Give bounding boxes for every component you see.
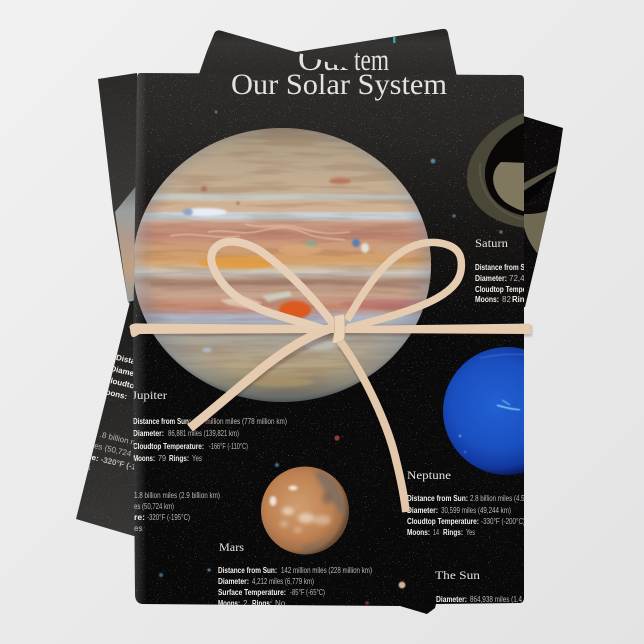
- planet: Mars: [261, 466, 349, 554]
- text: Saturn: Diameter:: [475, 274, 507, 283]
- text: Saturn: [475, 240, 524, 302]
- star field: [130, 70, 530, 620]
- back sheet title fragment: Our: [298, 41, 352, 78]
- text: The Sun: [435, 571, 522, 603]
- back sheet: left lower: Cloudtop: [104, 375, 140, 392]
- text: Jupiter: Diameter:: [133, 429, 164, 438]
- text: Jupiter: Moons:: [133, 454, 155, 463]
- text: Neptune: Yes: [466, 528, 475, 537]
- text: Jupiter: Yes: [192, 454, 202, 463]
- text: wrapped repeat of Uranus facts: [134, 491, 220, 533]
- text: Saturn: Distance from Sun:: [475, 263, 535, 272]
- ribbon left loop: [211, 242, 335, 331]
- back sheet title fragment: [299, 52, 389, 70]
- ribbon and bow: [129, 242, 532, 512]
- text: Saturn: 82: [502, 295, 511, 304]
- text: Neptune: Distance from Sun:: [407, 494, 468, 503]
- text: Neptune: Moons:: [407, 528, 430, 537]
- text: Mars: 2: [243, 599, 248, 608]
- ribbon right tail: [340, 341, 406, 512]
- back sheet: left upper: [98, 73, 137, 310]
- back sheet: left lower: re: -320°F (-195°C): [88, 452, 157, 477]
- text: wrapped repeat of Uranus facts: es (50,724 km): [134, 502, 174, 511]
- text: Neptune: Cloudtop Temperature:: [407, 517, 479, 526]
- text: Mars: Surface Temperature:: [218, 588, 286, 597]
- back sheet: left lower: Distance: [115, 353, 150, 369]
- text: Neptune: 2.8 billion miles (4.5 billion km): [470, 494, 554, 503]
- text: Saturn: Cloudtop Temperature:: [475, 285, 547, 294]
- text: Neptune: Neptune: [407, 468, 451, 482]
- text: Saturn: Saturn: [475, 236, 508, 250]
- back sheet: left lower: es (50,724 km): [93, 441, 148, 462]
- text: Neptune: -330°F (-200°C): [481, 517, 525, 526]
- text: Mars: Moons:: [218, 599, 240, 608]
- text: Jupiter: -166°F (-110°C): [209, 442, 248, 451]
- text: Jupiter: [132, 388, 287, 463]
- back sheet: top: [199, 28, 456, 75]
- text: Mars: 4,212 miles (6,779 km): [252, 577, 314, 586]
- text: Jupiter: 86,881 miles (139,821 km): [168, 429, 239, 438]
- text: The Sun: Diameter:: [436, 595, 467, 604]
- back sheet: left lower: Diameter: [110, 364, 145, 380]
- ribbon right loop: [347, 242, 461, 328]
- saturn on right sheet: [522, 165, 558, 254]
- planet: Jupiter: [130, 125, 440, 405]
- back sheet: right: [524, 116, 563, 307]
- text: Saturn: Moons:: [475, 295, 499, 304]
- text: Jupiter: Cloudtop Temperature:: [133, 442, 204, 451]
- ribbon knot: [332, 314, 345, 343]
- text: wrapped repeat of Uranus facts: re:: [134, 513, 145, 522]
- planet: Neptune: [443, 347, 524, 475]
- text: Jupiter: 484 million miles (778 million km): [193, 417, 287, 426]
- back sheet title fragment: tem: [354, 42, 389, 77]
- text: Saturn: 72,400: [509, 274, 534, 283]
- text: Saturn: Rings:: [512, 295, 536, 304]
- ribbon left tail: [190, 326, 338, 428]
- planet: Saturn: [467, 112, 526, 228]
- text: wrapped repeat of Uranus facts: -320°F (-195°C): [147, 513, 190, 522]
- text: Neptune: 14: [433, 528, 439, 537]
- text: Mars: Diameter:: [218, 577, 249, 586]
- back sheet: left lower: es: [81, 462, 92, 473]
- text: Mars: -85°F (-65°C): [290, 588, 325, 597]
- text: Neptune: [407, 472, 524, 536]
- text: Mars: Rings:: [252, 599, 272, 608]
- back sheet: left lower: .8 billion miles: [99, 430, 150, 450]
- text: Jupiter: 79: [158, 454, 166, 463]
- text: Mars: Mars: [219, 540, 244, 554]
- text: wrapped repeat of Uranus facts: es: [134, 524, 142, 533]
- front sheet: [133, 73, 524, 614]
- text: Jupiter: Rings:: [169, 454, 189, 463]
- text: Neptune: 30,599 miles (49,244 km): [441, 506, 511, 515]
- back sheet: left lower: Moons:: [98, 386, 128, 401]
- text: Jupiter: Jupiter: [132, 388, 167, 402]
- text: Neptune: Rings:: [443, 528, 463, 537]
- text: The Sun: 864,938 miles (1.4 million km): [470, 595, 554, 604]
- text: Neptune: Diameter:: [407, 506, 438, 515]
- text: Mars: 142 million miles (228 million km): [281, 566, 372, 575]
- back sheet: left lower: [76, 301, 134, 536]
- title: Our Solar System: [231, 68, 447, 101]
- ribbon band: [129, 323, 531, 337]
- text: The Sun: The Sun: [435, 568, 480, 582]
- text: wrapped repeat of Uranus facts: 1.8 billion miles (2.9 billion km): [134, 491, 220, 500]
- text: Mars: [218, 540, 372, 608]
- text: Jupiter: Distance from Sun:: [133, 417, 191, 426]
- text: Mars: No: [275, 599, 286, 608]
- text: Mars: Distance from Sun:: [218, 566, 277, 575]
